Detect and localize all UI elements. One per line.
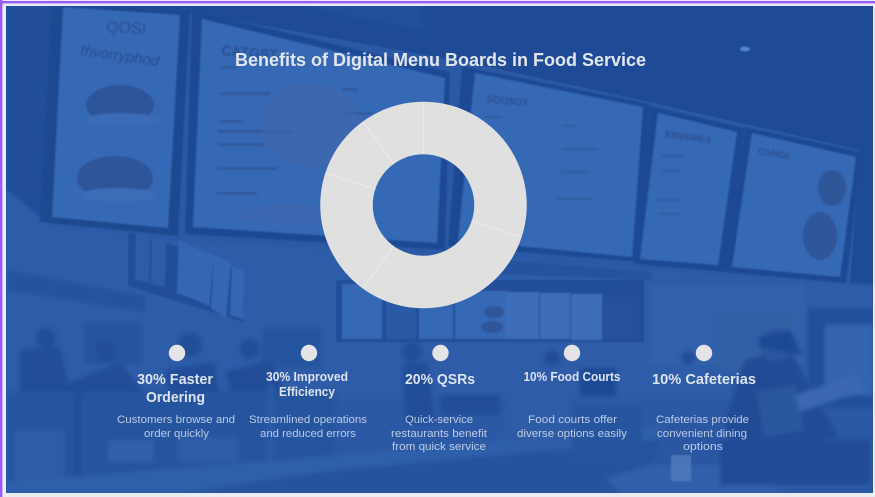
menu board 4: ENSSIMES — [665, 129, 712, 145]
heading: 20% QSRs — [405, 371, 475, 388]
description: Streamlined operations — [249, 414, 368, 426]
marker dot — [169, 345, 185, 361]
menu board 5 — [724, 127, 862, 283]
wall behind the counter — [810, 284, 872, 407]
description: convenient dining — [657, 428, 747, 440]
title: Benefits of Digital Menu Boards in Food Service — [235, 50, 646, 70]
description — [391, 414, 487, 453]
description: Customers browse and — [117, 414, 235, 426]
description: restaurants benefit — [391, 428, 487, 440]
paper cup — [671, 455, 691, 481]
menu board 3: SOUSOT — [486, 94, 529, 109]
column: cafeterias — [652, 345, 756, 453]
description: Quick-service — [405, 414, 473, 426]
heading: 30% Faster — [137, 371, 213, 388]
heading: 10% Cafeterias — [652, 371, 756, 388]
description — [517, 414, 628, 440]
donut chart — [326, 102, 522, 288]
column: QSRs — [391, 345, 487, 453]
side menu boards at left — [128, 232, 244, 322]
heading: Ordering — [146, 389, 205, 406]
marker dot — [696, 345, 712, 361]
counter and display case — [6, 385, 870, 493]
description — [117, 414, 235, 440]
marker dot — [564, 345, 580, 361]
description: options — [683, 441, 724, 453]
menu board 4 — [634, 106, 745, 272]
description: diverse options easily — [517, 428, 628, 440]
heading: 10% Food Courts — [524, 370, 621, 384]
menu board 1: portrait: QOSI — [106, 19, 147, 38]
column: food courts — [517, 345, 628, 440]
heading: Efficiency — [279, 385, 335, 399]
description: order quickly — [144, 428, 210, 440]
menu board 5: CANGE — [758, 146, 791, 162]
ceiling — [6, 6, 873, 285]
description: Cafeterias provide — [656, 414, 749, 426]
marker dot — [432, 345, 449, 361]
heading: 30% Improved — [266, 370, 348, 384]
column: faster ordering — [117, 345, 235, 440]
staff silhouettes — [20, 328, 851, 440]
description: from quick service — [392, 441, 486, 453]
column: improved efficiency — [249, 345, 368, 440]
heading — [137, 371, 213, 406]
heading — [266, 370, 348, 399]
marker dot — [301, 345, 317, 361]
description: and reduced errors — [260, 428, 357, 440]
menu board 2: main menu — [185, 10, 450, 250]
menu board 1: portrait — [40, 6, 190, 236]
menu board 2: main menu: CATGST — [221, 42, 279, 63]
description — [249, 414, 368, 440]
menu board 1: portrait: thvorryphod — [79, 42, 161, 70]
description — [656, 414, 749, 453]
lower menu boards — [336, 255, 653, 342]
menu board 3 — [448, 66, 650, 262]
description: Food courts offer — [528, 414, 617, 426]
